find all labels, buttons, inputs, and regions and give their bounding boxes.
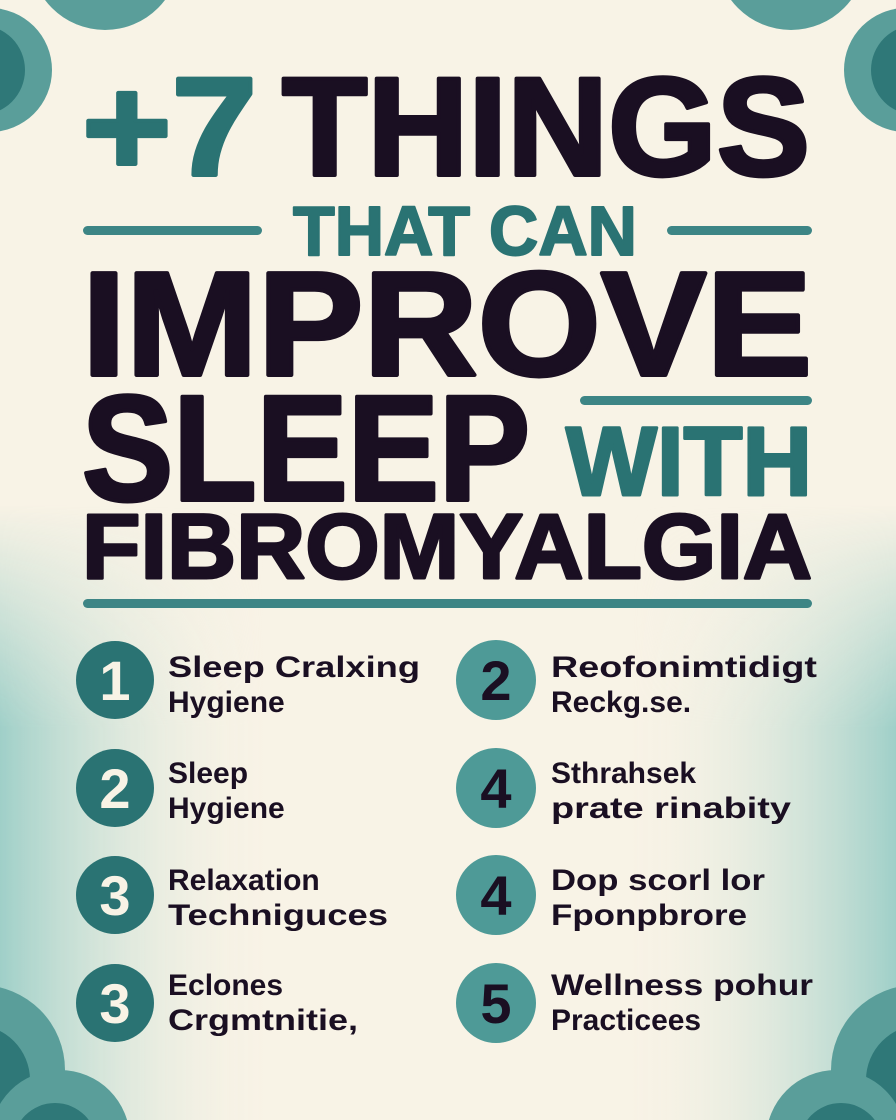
item 7: Fponpbrore bbox=[551, 899, 747, 932]
item 2: Hygiene bbox=[168, 792, 285, 825]
item 3 bbox=[76, 856, 388, 934]
item 8: Wellness pohur bbox=[551, 969, 813, 1002]
item 5: 2 bbox=[480, 649, 512, 712]
item 7: Dop scorl lor bbox=[551, 864, 765, 897]
item 8: Practicees bbox=[551, 1004, 701, 1037]
item 5 bbox=[456, 640, 817, 720]
item 8 bbox=[456, 963, 813, 1043]
item 5: Reckg.se. bbox=[551, 686, 691, 719]
corner decoration: bottom-left bbox=[0, 985, 130, 1120]
item 6: prate rinabity bbox=[551, 792, 791, 825]
item 1: Hygiene bbox=[168, 686, 285, 719]
item 2 bbox=[76, 749, 285, 827]
list right column bbox=[456, 640, 817, 1043]
title: THAT CAN bbox=[293, 192, 637, 270]
title: FIBROMYALGIA bbox=[82, 496, 812, 598]
title: SLEEP bbox=[82, 364, 530, 532]
title: +7 bbox=[82, 48, 257, 205]
item 5: Reofonimtidigt bbox=[551, 651, 817, 684]
list left column bbox=[76, 641, 420, 1042]
corner decoration: top-left bbox=[0, 0, 180, 132]
item 1: 1 bbox=[99, 649, 131, 712]
item 6: Sthrahsek bbox=[551, 757, 696, 790]
item 1 bbox=[76, 641, 420, 719]
item 4: Crgmtnitie, bbox=[168, 1004, 358, 1037]
item 6 bbox=[456, 748, 791, 828]
item 4: 3 bbox=[99, 972, 131, 1035]
item 3: Relaxation bbox=[168, 864, 320, 897]
corner decoration: bottom-right bbox=[766, 985, 896, 1120]
item 2: Sleep bbox=[168, 757, 248, 790]
item 8: 5 bbox=[480, 972, 512, 1035]
title bbox=[82, 48, 812, 608]
item 3: Techniguces bbox=[168, 899, 388, 932]
item 3: 3 bbox=[99, 864, 131, 927]
title: IMPROVE bbox=[82, 242, 812, 407]
item 4 bbox=[76, 964, 358, 1042]
item 2: 2 bbox=[99, 757, 131, 820]
item 6: 4 bbox=[480, 757, 512, 820]
item 4: Eclones bbox=[168, 969, 283, 1002]
title: THINGS bbox=[282, 48, 810, 205]
corner decoration: top-right bbox=[716, 0, 896, 132]
item 7: 4 bbox=[480, 864, 512, 927]
item 7 bbox=[456, 855, 765, 935]
item 1: Sleep Cralxing bbox=[168, 651, 420, 684]
title: WITH bbox=[566, 407, 812, 516]
